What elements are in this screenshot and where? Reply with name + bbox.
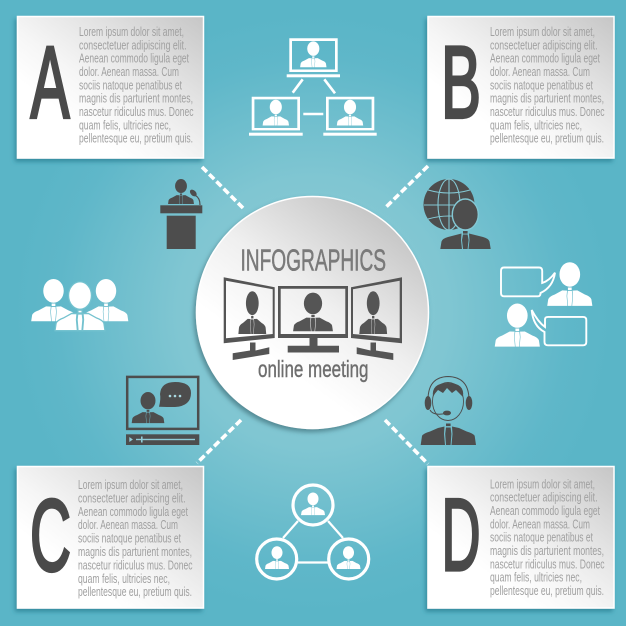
panel B xyxy=(428,16,614,158)
text block A: consectetuer adipiscing elit. xyxy=(79,37,186,52)
text block D: quam felis, ultricies nec, xyxy=(490,570,582,585)
speech bubble xyxy=(159,382,191,407)
left laptop xyxy=(249,97,303,136)
text block C: nascetur ridiculus mus. Donec xyxy=(78,557,193,572)
left monitor xyxy=(224,277,275,360)
text block C: Lorem ipsum dolor sit amet, xyxy=(78,477,183,492)
text block C: quam felis, ultricies nec, xyxy=(78,571,170,586)
shoulders and tie xyxy=(446,424,451,426)
text block B xyxy=(490,24,605,146)
text block A: magnis dis parturient montes, xyxy=(79,91,193,106)
lower speaker xyxy=(495,304,540,347)
central circle xyxy=(196,196,428,428)
text block C: pellentesque eu, pretium quis. xyxy=(78,584,192,599)
letter B: B xyxy=(441,26,481,140)
subtitle: online meeting xyxy=(258,356,368,382)
text block C xyxy=(78,477,193,599)
icon: team of three xyxy=(31,279,128,331)
top node xyxy=(293,485,333,525)
text block A: nascetur ridiculus mus. Donec xyxy=(79,104,194,119)
text block A: Lorem ipsum dolor sit amet, xyxy=(79,24,184,39)
panel D xyxy=(428,466,614,608)
agent xyxy=(440,199,491,249)
text block A: dolor. Aenean massa. Cum xyxy=(79,64,179,79)
letter D: D xyxy=(442,478,480,592)
network links xyxy=(283,521,343,562)
letter A: A xyxy=(30,26,70,140)
text block B: quam felis, ultricies nec, xyxy=(490,117,582,132)
center monitor xyxy=(278,286,348,352)
text block A: quam felis, ultricies nec, xyxy=(79,117,171,132)
panel A xyxy=(18,16,204,158)
top laptop xyxy=(287,38,340,77)
icon: two people chatting xyxy=(495,262,592,347)
upper bubble xyxy=(501,268,555,296)
video player bar xyxy=(126,434,199,445)
text block A: sociis natoque penatibus et xyxy=(79,77,182,92)
letter C: C xyxy=(30,478,71,592)
globe xyxy=(424,179,474,230)
text block C: magnis dis parturient montes, xyxy=(78,544,192,559)
left node xyxy=(257,539,297,579)
title: INFOGRAPHICS xyxy=(240,243,386,278)
dashed connectors xyxy=(197,166,428,464)
icon: circle network xyxy=(257,485,369,579)
right laptop xyxy=(323,97,377,136)
hair xyxy=(433,383,463,397)
face outline xyxy=(432,382,464,420)
monitors icon xyxy=(224,277,402,360)
icon: video call xyxy=(126,377,199,445)
microphone xyxy=(430,410,446,414)
text block C: consectetuer adipiscing elit. xyxy=(78,490,186,505)
text block A: pellentesque eu, pretium quis. xyxy=(79,131,193,146)
panel C xyxy=(18,466,204,608)
right node xyxy=(329,539,369,579)
right monitor xyxy=(351,277,402,360)
icon: laptop network xyxy=(249,38,377,136)
network links xyxy=(293,79,335,114)
text block C: sociis natoque penatibus et xyxy=(78,531,181,546)
icon: headset operator xyxy=(421,376,476,445)
headband xyxy=(428,376,469,400)
text block C: Aenean commodo ligula eget xyxy=(78,504,188,519)
upper speaker xyxy=(547,262,592,306)
text block A: Aenean commodo ligula eget xyxy=(79,51,189,66)
icon: global support agent xyxy=(424,179,491,249)
lower bubble xyxy=(532,310,586,345)
icon: speaker at podium xyxy=(160,179,202,249)
text block D xyxy=(490,476,605,598)
text block C: dolor. Aenean massa. Cum xyxy=(78,517,178,532)
text block A xyxy=(79,24,194,146)
